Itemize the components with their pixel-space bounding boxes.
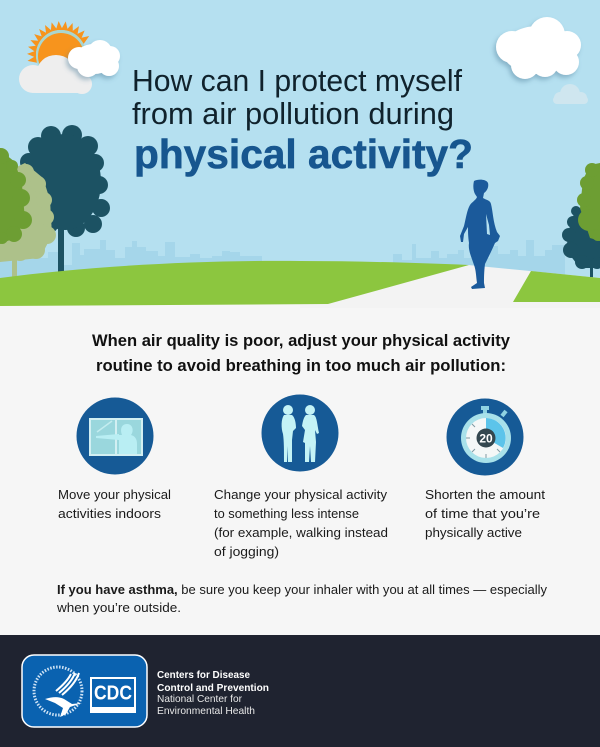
- footer text: [157, 669, 269, 717]
- title: from air pollution during: [132, 96, 454, 131]
- icon: two walking people: [262, 394, 338, 472]
- text: change intensity: Change your physical activity: [214, 487, 388, 502]
- ground: path: [300, 264, 600, 308]
- ground: right hill: [513, 271, 600, 302]
- icon: grey cloud: [19, 55, 92, 94]
- asthma note: [56, 582, 547, 615]
- intro heading: routine to avoid breathing in too much air pollution:: [96, 356, 506, 375]
- intro heading: [92, 331, 511, 375]
- text: move indoors: Move your physical: [58, 487, 171, 502]
- tree: green right: [577, 163, 600, 241]
- ground: left hill: [0, 261, 469, 306]
- text: change intensity: of jogging): [214, 544, 279, 559]
- icon: stopwatch: 20: [479, 432, 493, 446]
- logo: HHS and CDC: CDC: [94, 682, 132, 704]
- skyline: right: [393, 240, 565, 278]
- logo: HHS and CDC: [22, 655, 147, 727]
- text: shorten time: [425, 487, 545, 540]
- icon: window with person indoors: [76, 398, 154, 474]
- text: change intensity: to something less intense: [214, 506, 359, 521]
- text: shorten time: Shorten the amount: [425, 487, 545, 502]
- icon: large white cloud: [496, 17, 581, 79]
- footer text: Centers for Disease: [157, 669, 250, 681]
- title: How can I protect myself: [132, 63, 462, 98]
- icon: small pale cloud: [553, 84, 588, 104]
- tree: dark teal left: [20, 125, 110, 273]
- footer text: National Center for: [157, 693, 242, 705]
- panel: sky scene: [0, 0, 600, 308]
- title: physical activity?: [134, 131, 473, 177]
- footer text: Environmental Health: [157, 705, 255, 717]
- icon: white cloud: [68, 40, 120, 77]
- asthma note: when you’re outside.: [56, 600, 181, 615]
- panel: footer: [0, 635, 600, 747]
- text: move indoors: activities indoors: [58, 506, 162, 521]
- skyline: left: [0, 240, 262, 280]
- text: change intensity: [214, 487, 388, 559]
- text: shorten time: of time that you’re: [425, 506, 540, 521]
- footer text: Control and Prevention: [157, 682, 269, 694]
- text: move indoors: [58, 487, 171, 521]
- icon: stopwatch: [446, 398, 524, 476]
- tree: sage left: [0, 163, 56, 277]
- text: change intensity: (for example, walking instead: [214, 525, 388, 540]
- tree: green left: [0, 148, 32, 244]
- text: shorten time: physically active: [425, 525, 522, 540]
- asthma note: If you have asthma, be sure you keep your inhaler with you at all times — especially: [57, 582, 547, 597]
- tree: dark teal right: [562, 206, 600, 278]
- intro heading: When air quality is poor, adjust your physical activity: [92, 331, 511, 350]
- icon: sun: [27, 21, 91, 80]
- title: [132, 63, 473, 177]
- figure: stretching person: [460, 180, 500, 289]
